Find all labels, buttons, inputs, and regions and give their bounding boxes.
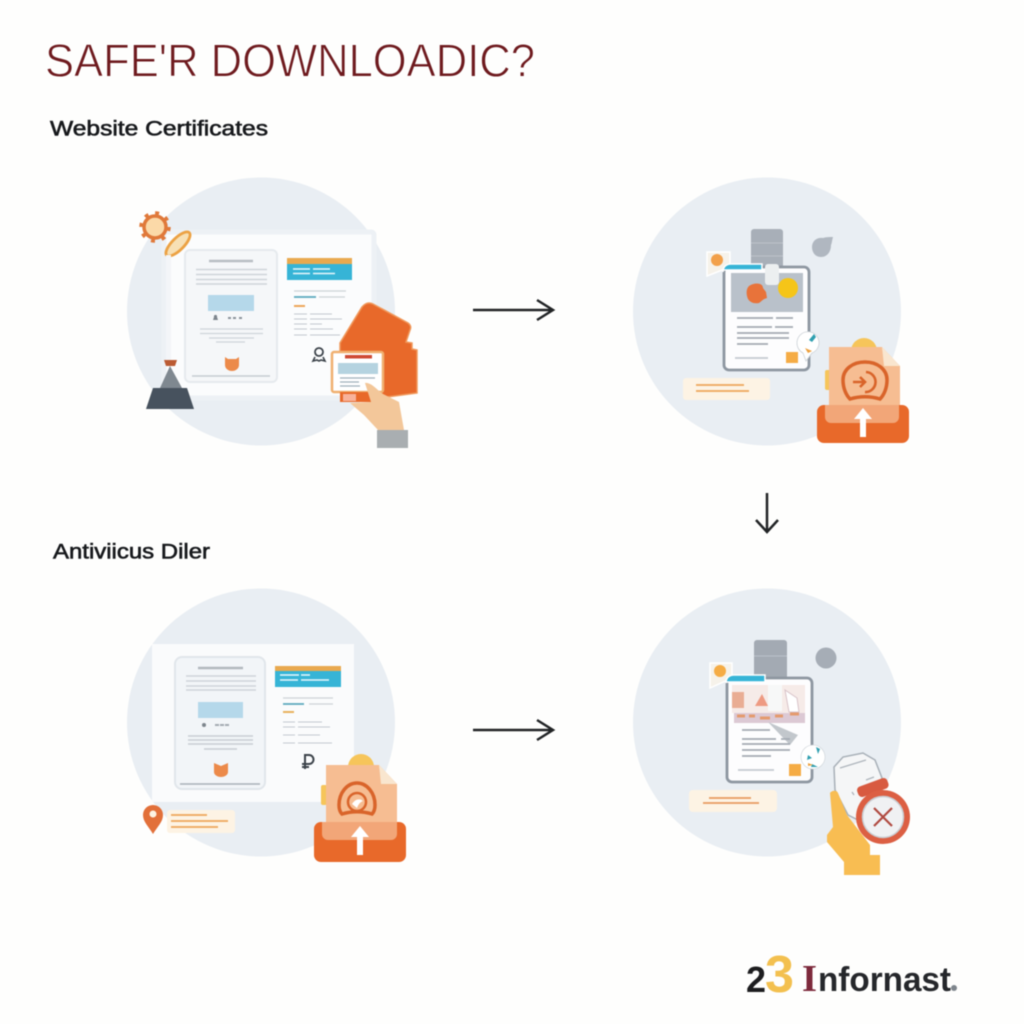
icon: orange ticket stack xyxy=(340,303,417,397)
arrow: right top xyxy=(473,300,553,320)
note box xyxy=(167,810,235,833)
logo xyxy=(746,946,957,1004)
corrupted document card xyxy=(726,675,812,782)
icon: pin badge xyxy=(801,745,825,769)
icon: gray phone xyxy=(754,640,787,680)
certificate right details xyxy=(275,666,341,769)
browser frame xyxy=(164,232,374,398)
icon: gear xyxy=(141,213,169,241)
title: SAFE'R DOWNLOADIC? xyxy=(45,34,535,86)
logo: 2 xyxy=(746,959,766,1000)
logo: I xyxy=(802,958,817,1000)
icon: hand holding card xyxy=(350,383,408,448)
icon: location pin xyxy=(143,805,163,834)
icon: leaf xyxy=(162,228,194,260)
certificate left card xyxy=(185,250,277,382)
panel: blocked download illustration xyxy=(633,588,910,875)
panel: document upload illustration xyxy=(633,178,909,446)
certificate left card xyxy=(175,657,265,789)
logo: 3 xyxy=(765,946,794,1004)
icon: flag note xyxy=(710,663,732,688)
icon: desk stand xyxy=(146,255,194,409)
panel: website certificates illustration xyxy=(127,178,417,448)
background circle xyxy=(633,588,901,856)
icon: pin badge xyxy=(797,332,819,361)
icon: gray phone xyxy=(751,229,783,269)
icon: yellow hand xyxy=(827,791,880,875)
icon: small id card xyxy=(332,352,383,402)
logo: nfornast xyxy=(818,961,951,999)
heading: antivirus: Antiviicus Diler xyxy=(53,540,210,564)
background circle xyxy=(127,178,395,446)
arrow: right bottom xyxy=(473,720,553,740)
panel: antivirus illustration xyxy=(127,588,406,862)
icon: paper scroll xyxy=(834,753,882,822)
icon: gray gear xyxy=(816,648,836,668)
icon: download folder tray xyxy=(817,338,909,443)
background circle xyxy=(127,588,395,856)
certificate right details xyxy=(287,258,352,361)
icon: gray blob xyxy=(812,237,833,257)
document card xyxy=(723,264,809,370)
heading: website certificates: Website Certificates xyxy=(50,118,268,140)
arrow: down xyxy=(756,493,778,532)
icon: download folder tray xyxy=(314,754,406,862)
note box xyxy=(689,790,777,812)
icon: flag note xyxy=(707,252,730,276)
note box xyxy=(683,378,770,400)
browser panel xyxy=(152,644,354,802)
icon: stopwatch with cross xyxy=(856,777,910,844)
background circle xyxy=(633,178,901,446)
